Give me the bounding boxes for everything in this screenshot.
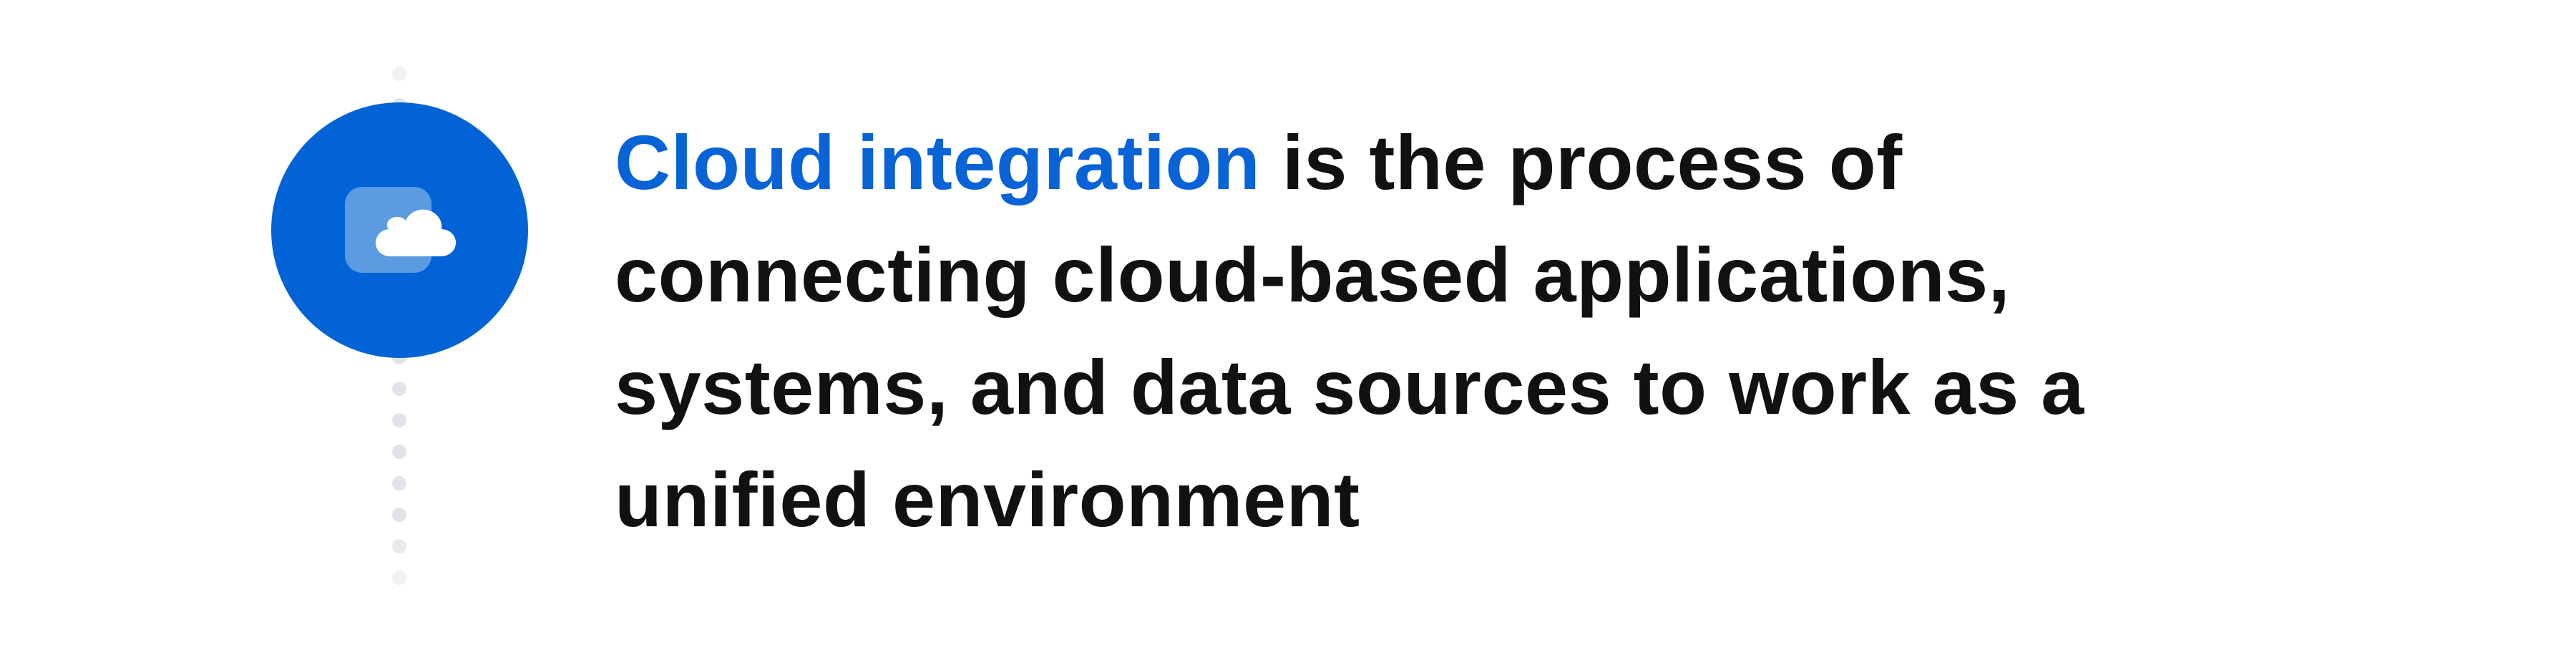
definition text: unified environment <box>615 456 1360 543</box>
definition text: connecting cloud-based applications, <box>615 231 2010 318</box>
timeline dots <box>392 67 406 585</box>
icon: cloud in blue circle <box>271 102 528 358</box>
definition text: Cloud integration is the process of <box>615 119 1903 205</box>
definition text: systems, and data sources to work as a <box>615 344 2084 430</box>
definition text <box>615 119 2084 543</box>
